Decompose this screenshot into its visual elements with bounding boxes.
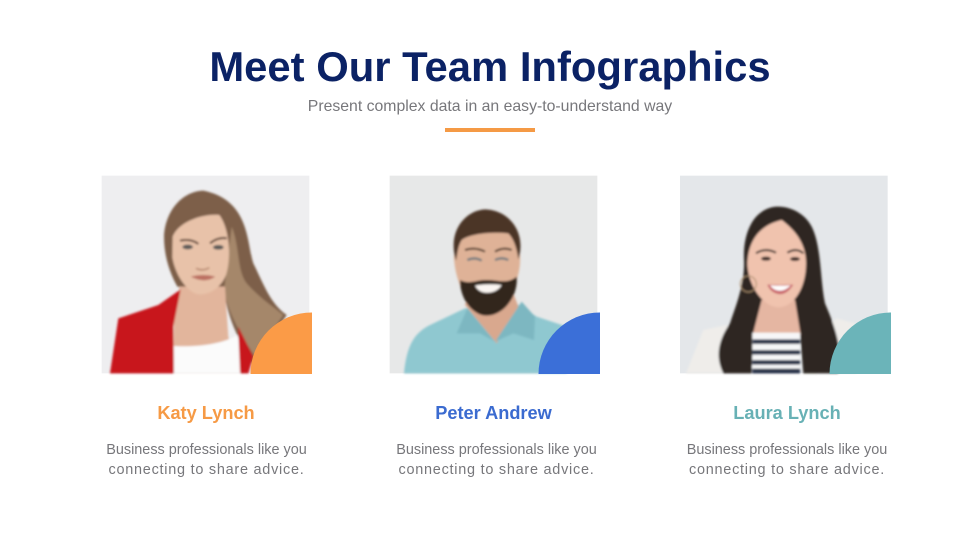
description: Peter Andrew: connecting to share advice. (398, 462, 595, 478)
name: Laura Lynch: Laura Lynch (733, 403, 841, 423)
photo: Katy Lynch (102, 176, 310, 376)
decorative quarter circle: blue (538, 312, 600, 374)
description: Katy Lynch: Business professionals like you (106, 442, 307, 458)
description: Laura Lynch: Business professionals like you (687, 442, 887, 458)
description: Katy Lynch: connecting to share advice. (108, 462, 305, 478)
decorative quarter circle: teal (830, 312, 891, 374)
name: Peter Andrew: Peter Andrew (435, 403, 552, 423)
accent underline (445, 128, 535, 132)
photo: Peter Andrew (390, 176, 598, 375)
description: Peter Andrew (396, 442, 597, 478)
name: Katy Lynch: Katy Lynch (157, 403, 255, 423)
description: Katy Lynch (106, 442, 307, 478)
title: Meet Our Team Infographics (209, 42, 771, 90)
decorative quarter circle: orange (250, 312, 312, 374)
description: Laura Lynch (687, 442, 887, 478)
photo: Laura Lynch (680, 176, 888, 376)
description: Peter Andrew: Business professionals like you (396, 442, 597, 458)
subtitle: Present complex data in an easy-to-understand way (308, 98, 672, 115)
description: Laura Lynch: connecting to share advice. (689, 462, 885, 478)
